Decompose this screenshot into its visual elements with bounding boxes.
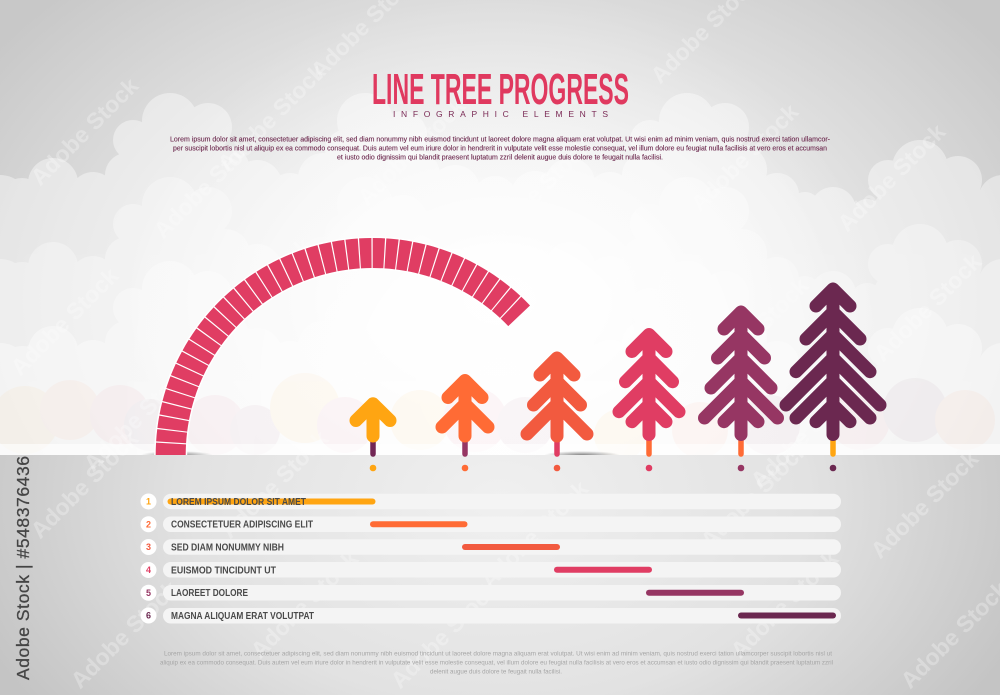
stock watermarks: Adobe Stock: [685, 98, 803, 216]
tree 3: [527, 358, 587, 454]
row 1: 1: [146, 497, 151, 507]
stock watermarks: Adobe Stock: [78, 358, 196, 476]
stock watermarks: Adobe Stock: [725, 545, 843, 663]
stock watermarks: Adobe Stock: [25, 425, 143, 543]
stock watermarks: Adobe Stock: [352, 92, 470, 210]
row 6: [140, 608, 841, 624]
row 3: [140, 539, 841, 555]
row 1: [140, 494, 841, 510]
footer paragraph: delenit augue duis dolore te feugait nulla facilisi.: [430, 668, 562, 676]
row 4: 4: [146, 565, 151, 575]
stock watermarks: Adobe Stock: [148, 125, 266, 243]
ground: [0, 455, 1000, 695]
progress arc: [171, 253, 519, 455]
tree 1: [356, 404, 390, 454]
intro paragraph: [170, 136, 831, 162]
row 5: [140, 585, 841, 601]
stock watermarks: Adobe Stock: [868, 248, 986, 366]
stock watermarks: Adobe Stock: [198, 232, 316, 350]
footer paragraph: aliquip ex ea commodo consequat. Duis autem vel eum iriure dolor in hendrerit in vulputate velit esse molestie consequat, vel illum dolore eu feugiat nulla facilisis at vero eros et accumsan et iusto odio dignissim qui blandit praesent luptatum zzril: [160, 660, 834, 666]
stock watermarks: Adobe Stock: [832, 118, 950, 236]
stock watermarks: Adobe Stock: [475, 475, 593, 593]
row 5: LAOREET DOLORE: [171, 588, 248, 599]
footer paragraph: Lorem ipsum dolor sit amet, consectetuer adipiscing elit, sed diam nonummy nibh euismod tincidunt ut laoreet dolore magna aliquam erat volutpat. Ut wisi enim ad minim veniam, quis nostrud exerci tation ullamcorper suscipit lobortis nisl ut: [164, 650, 832, 658]
stock watermarks: Adobe Stock: [865, 445, 983, 563]
intro paragraph: Lorem ipsum dolor sit amet, consectetuer adipiscing elit, sed diam nonummy nibh euismod tincidunt ut laoreet dolore magna aliquam erat volutpat. Ut wisi enim ad minim veniam, quis nostrud exerci tation ullamcor-: [170, 136, 831, 144]
white tree base band: [0, 444, 1000, 456]
stock watermarks: Adobe Stock: [25, 72, 143, 190]
row 4: [140, 562, 841, 578]
trees: [356, 289, 880, 454]
stock watermarks: Adobe Stock: [695, 272, 813, 390]
row 3: SED DIAM NONUMMY NIBH: [171, 542, 284, 554]
row 6: MAGNA ALIQUAM ERAT VOLUTPAT: [171, 611, 314, 622]
tree 4: [619, 334, 679, 454]
title: LINE TREE PROGRESS: [372, 65, 629, 114]
subtitle: INFOGRAPHIC ELEMENTS: [393, 109, 608, 119]
tree marker dots: [370, 465, 836, 471]
stock watermarks: Adobe Stock: [65, 575, 183, 693]
distant pastel trees: [0, 373, 995, 461]
stock watermarks: Adobe Stock: [332, 282, 450, 400]
row 2: [140, 516, 841, 532]
row 3: 3: [146, 542, 151, 552]
stock watermarks: Adobe Stock: [745, 375, 863, 493]
stock watermarks: Adobe Stock: [532, 248, 650, 366]
tree 5: [704, 312, 778, 454]
intro paragraph: per suscipit lobortis nisl ut aliquip ex ea commodo consequat. Duis autem vel eum iriure dolor in hendrerit in vulputate velit esse molestie consequat, vel illum dolore eu feugiat nulla facilisis at vero eros et accumsan: [173, 146, 827, 152]
stock watermarks: Adobe Stock: [695, 435, 813, 553]
timeline list: [140, 494, 841, 624]
row 1: LOREM IPSUM DOLOR SIT AMET: [171, 497, 306, 508]
stock watermarks: Adobe Stock: [385, 575, 503, 693]
sky background: [0, 0, 1000, 456]
stock watermarks: Adobe Stock: [212, 58, 330, 176]
stock watermarks: Adobe Stock: [5, 262, 123, 380]
tree 2: [442, 380, 488, 454]
stock watermarks: Adobe Stock: [245, 545, 363, 663]
row 2: 2: [146, 519, 151, 529]
tree shadow: [544, 451, 620, 459]
arc shadow: [141, 451, 213, 459]
row 4: EUISMOD TINCIDUNT UT: [171, 565, 276, 576]
stock id label: Adobe Stock | #548376436: [13, 456, 33, 680]
footer paragraph: [160, 650, 834, 676]
intro paragraph: et iusto odio dignissim qui blandit praesent luptatum zzril delenit augue duis dolore te feugait nulla facilisi.: [337, 154, 663, 162]
row 2: CONSECTETUER ADIPISCING ELIT: [171, 520, 313, 531]
row 6: 6: [146, 611, 151, 621]
stock watermarks: Adobe Stock: [215, 425, 333, 543]
tree 6: [786, 289, 880, 454]
stock watermarks: Adobe Stock: [478, 132, 596, 250]
row 5: 5: [146, 588, 151, 598]
